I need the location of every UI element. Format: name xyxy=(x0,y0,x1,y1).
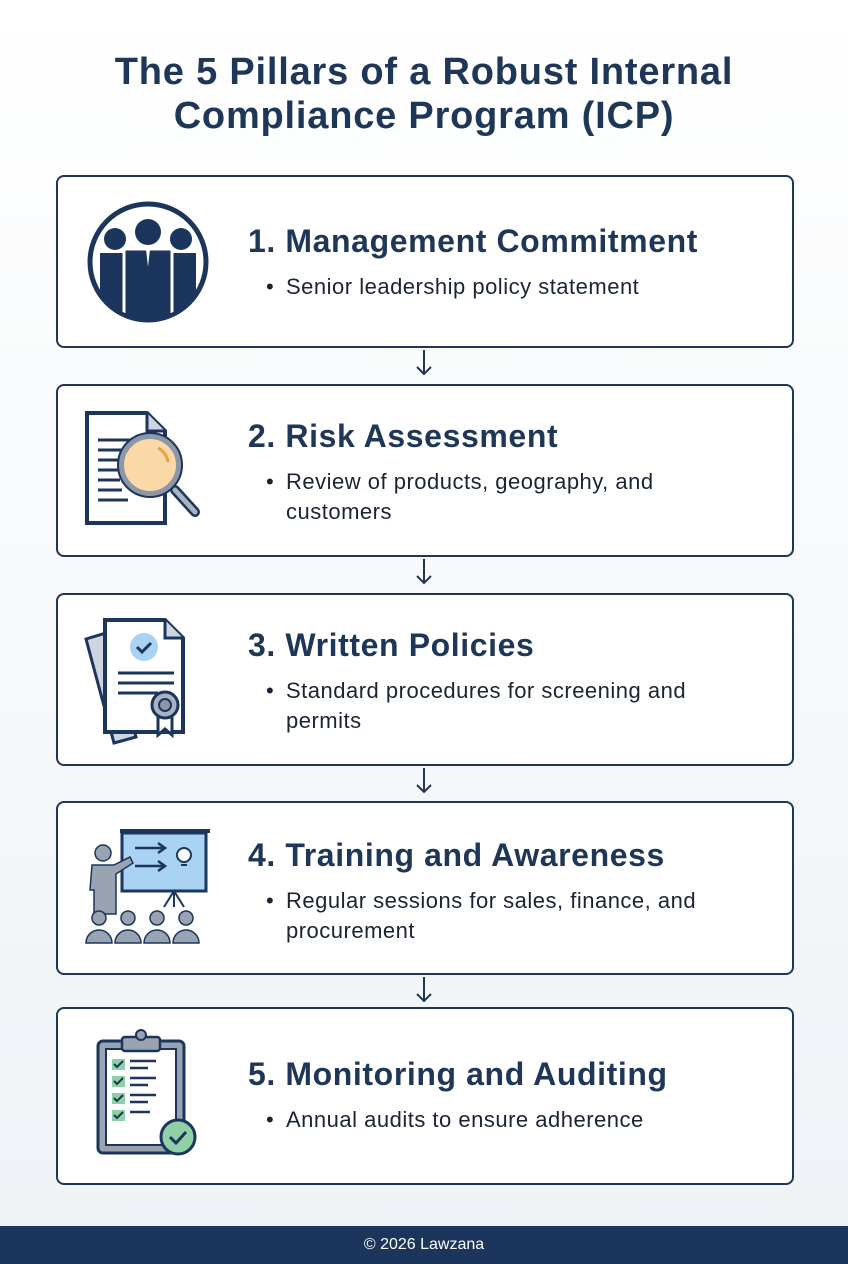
arrow xyxy=(416,350,432,376)
heading: 5. Monitoring and Auditing xyxy=(248,1056,668,1092)
panel: monitoring xyxy=(56,1007,794,1185)
title: The 5 Pillars of a Robust Internal xyxy=(115,51,733,93)
footer: © 2026 Lawzana xyxy=(364,1236,484,1253)
bullet: Regular sessions for sales, finance, and procurement xyxy=(286,888,696,943)
arrow xyxy=(416,768,432,794)
bullet: Standard procedures for screening and permits xyxy=(286,678,686,733)
icon: certified documents xyxy=(84,618,185,745)
icon: document with magnifier xyxy=(85,411,200,525)
heading: 4. Training and Awareness xyxy=(248,837,665,873)
arrow xyxy=(416,559,432,584)
panel: written policies xyxy=(56,593,794,766)
heading: 1. Management Commitment xyxy=(248,223,698,259)
heading: 3. Written Policies xyxy=(248,627,534,663)
icon: presenter xyxy=(85,829,210,944)
heading: 2. Risk Assessment xyxy=(248,418,558,454)
icon: clipboard checklist xyxy=(96,1029,196,1156)
panel: training xyxy=(56,801,794,975)
arrow xyxy=(416,977,432,1002)
panel: management commitment xyxy=(56,175,794,348)
footer xyxy=(0,1226,848,1264)
bullet: Review of products, geography, and customers xyxy=(286,469,654,524)
title: Compliance Program (ICP) xyxy=(174,95,674,137)
icon: leadership team xyxy=(88,202,208,322)
title xyxy=(115,51,733,137)
panel: risk assessment xyxy=(56,384,794,557)
bullet: Senior leadership policy statement xyxy=(286,274,639,299)
bullet: Annual audits to ensure adherence xyxy=(286,1107,644,1132)
